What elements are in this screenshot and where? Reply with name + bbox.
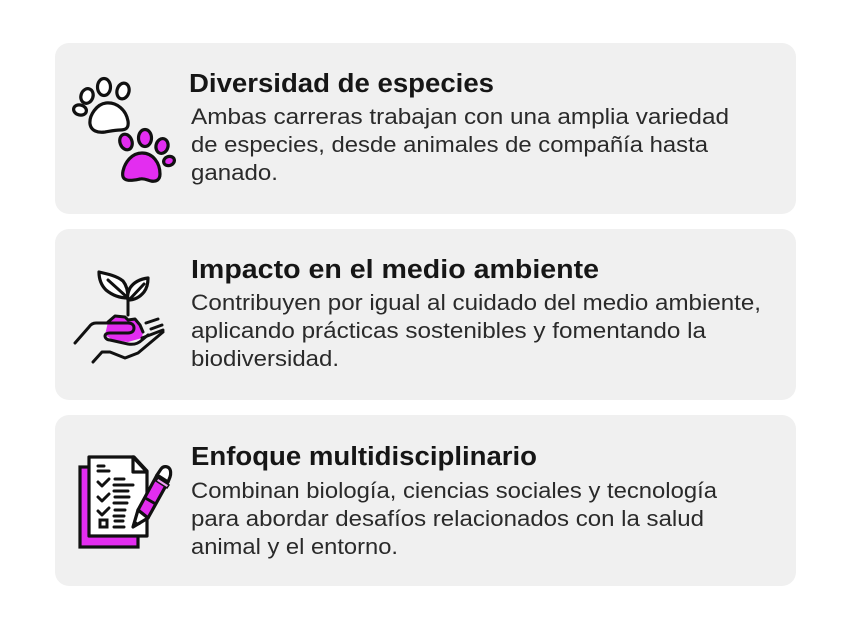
icon: hand holding plant xyxy=(75,272,163,362)
text block: diversidad de especies: Ambas carreras trabajan con una amplia variedad xyxy=(191,104,729,129)
icon: checklist and pencil xyxy=(80,457,171,547)
text block: diversidad de especies: ganado. xyxy=(191,160,278,185)
heading: impacto en el medio ambiente: Impacto en el medio ambiente xyxy=(191,256,599,284)
text block: impacto en el medio ambiente: Contribuyen por igual al cuidado del medio ambiente, xyxy=(191,290,761,315)
panel: diversidad de especies xyxy=(55,43,796,214)
text block: diversidad de especies: de especies, desde animales de compañía hasta xyxy=(191,132,709,157)
text block: enfoque multidisciplinario: Combinan biología, ciencias sociales y tecnología xyxy=(191,478,718,503)
text block: diversidad de especies xyxy=(191,104,729,185)
text block: impacto en el medio ambiente: biodiversidad. xyxy=(191,346,339,371)
heading: enfoque multidisciplinario: Enfoque multidisciplinario xyxy=(191,443,537,471)
text block: enfoque multidisciplinario xyxy=(191,478,718,559)
icon: paw prints xyxy=(72,78,176,181)
text block: enfoque multidisciplinario: para abordar desafíos relacionados con la salud xyxy=(191,506,704,531)
text block: impacto en el medio ambiente: aplicando prácticas sostenibles y fomentando la xyxy=(191,318,707,343)
panel: enfoque multidisciplinario xyxy=(55,415,796,586)
panel: impacto en el medio ambiente xyxy=(55,229,796,400)
text block: enfoque multidisciplinario: animal y el entorno. xyxy=(191,534,398,559)
text block: impacto en el medio ambiente xyxy=(191,290,761,371)
heading: diversidad de especies: Diversidad de especies xyxy=(189,70,494,98)
